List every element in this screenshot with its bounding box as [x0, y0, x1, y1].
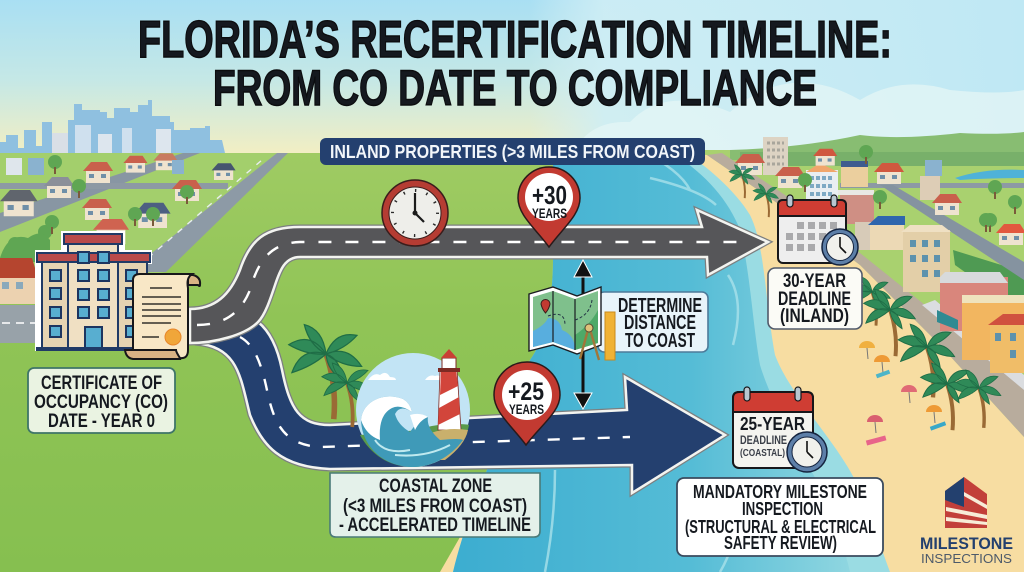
icon: certificate scroll	[125, 274, 200, 359]
label: 30-year deadline	[768, 268, 862, 329]
label: determine distance to coast: DISTANCE	[624, 312, 696, 334]
label: mandatory milestone inspection: SAFETY REVIEW)	[724, 533, 837, 553]
logo: Milestone Inspections	[920, 477, 1013, 566]
icon: 30-year calendar	[778, 195, 858, 265]
coastline: right land, beach and ocean	[440, 132, 1024, 572]
icon: palm trees	[289, 325, 371, 427]
double arrow: distance to coast	[574, 260, 592, 409]
label: determine distance to coast: DETERMINE	[618, 295, 702, 317]
ground: green land	[0, 153, 600, 572]
icon: 25-year calendar: (COASTAL)	[740, 447, 785, 459]
inland properties banner: INLAND PROPERTIES (>3 MILES FROM COAST)	[330, 142, 695, 162]
milestone pin: +30 years: YEARS	[532, 206, 567, 221]
label: determine distance to coast	[598, 292, 708, 352]
label: 30-year deadline: DEADLINE	[778, 289, 851, 310]
label: certificate of occupancy: DATE - YEAR 0	[48, 411, 155, 432]
label: certificate of occupancy: OCCUPANCY (CO)	[34, 392, 168, 413]
label: certificate of occupancy: CERTIFICATE OF	[41, 373, 162, 394]
logo: Milestone Inspections: MILESTONE	[920, 534, 1013, 553]
milestone pin: +25 years	[494, 362, 560, 445]
title	[138, 11, 892, 116]
milestone pin: +30 years: +30	[532, 180, 567, 210]
label: certificate of occupancy	[28, 368, 175, 433]
neighbourhood: inland houses and streets	[0, 153, 288, 343]
label: coastal zone	[330, 473, 540, 537]
inland properties banner	[320, 138, 705, 165]
inland road (grey arrow)	[190, 210, 768, 343]
label: 30-year deadline: 30-YEAR	[783, 271, 846, 292]
icon: 25-year calendar	[733, 387, 827, 472]
label: coastal zone: COASTAL ZONE	[379, 476, 492, 497]
icon: wall clock	[382, 180, 448, 246]
icon: 25-year calendar: DEADLINE	[740, 435, 787, 447]
coastal town buildings	[735, 137, 1024, 373]
icon: CO building	[35, 231, 152, 351]
skyline: inland city	[0, 100, 225, 153]
label: coastal zone: (<3 MILES FROM COAST)	[343, 496, 527, 517]
coastal road (blue arrow)	[195, 322, 725, 493]
label: coastal zone: - ACCELERATED TIMELINE	[339, 515, 531, 536]
sky background	[0, 0, 1024, 160]
title: FROM CO DATE TO COMPLIANCE	[213, 60, 817, 116]
logo: Milestone Inspections: INSPECTIONS	[921, 551, 1012, 566]
label: mandatory milestone inspection: MANDATORY MILESTONE	[693, 482, 867, 502]
label: mandatory milestone inspection: INSPECTION	[742, 499, 823, 519]
milestone pin: +25 years: YEARS	[509, 401, 544, 417]
label: 30-year deadline: (INLAND)	[780, 306, 849, 327]
label: determine distance to coast: TO COAST	[625, 330, 695, 352]
label: mandatory milestone inspection	[677, 478, 883, 556]
milestone pin: +25 years: +25	[508, 378, 544, 406]
icon: lighthouse and wave	[356, 349, 470, 467]
icon: 25-year calendar: 25-YEAR	[740, 414, 805, 434]
label: mandatory milestone inspection: (STRUCTURAL & ELECTRICAL	[685, 517, 876, 537]
milestone pin: +30 years	[518, 167, 580, 247]
icon: map with compass and ruler	[529, 287, 615, 360]
beach palms and umbrellas	[729, 165, 1001, 445]
